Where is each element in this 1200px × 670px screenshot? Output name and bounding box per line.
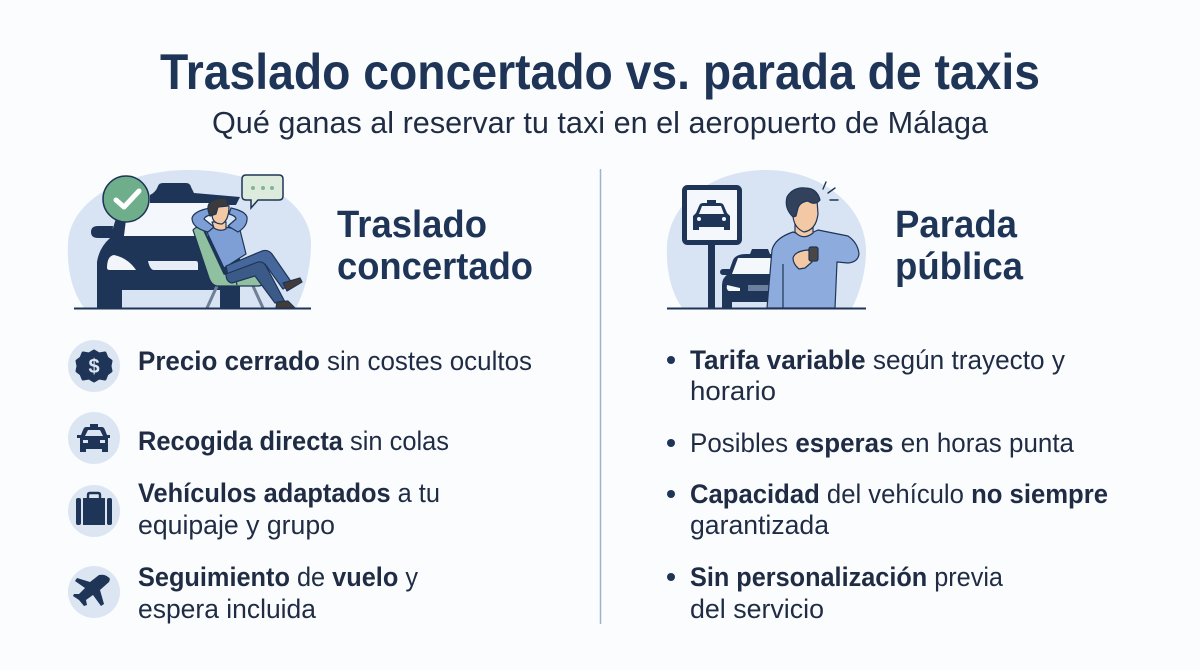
icon: plane [68,566,120,618]
icon: taxi [68,412,120,464]
subtitle: Qué ganas al reservar tu taxi en el aeropuerto de Málaga [212,105,989,140]
heading: traslado concertado [337,204,533,288]
heading: traslado concertado: Traslado [337,204,487,246]
heading: parada pública: Parada [895,204,1018,246]
item: capacidad del vehículo [667,479,1108,540]
item: recogida directa [68,412,449,464]
item: sin personalización: del servicio [690,594,824,624]
item: capacidad del vehículo: garantizada [690,510,830,540]
title: Traslado concertado vs. parada de taxis [160,44,1040,100]
panel: traslado concertado [68,170,533,624]
heading: parada pública: pública [895,246,1024,288]
heading: traslado concertado: concertado [337,246,533,288]
taxi stop sign [684,188,740,308]
item: sin personalización [667,562,1004,624]
item: sin personalización: Sin personalización previa [690,562,1004,592]
taxi [91,183,240,308]
item: seguimiento de vuelo: espera incluida [138,594,317,624]
item: seguimiento de vuelo [68,562,418,624]
heading: parada pública [895,204,1024,288]
icon: price badge [68,340,120,392]
icon: speech bubble [242,175,283,208]
icon: suitcase [68,485,120,537]
panel: parada pública [667,170,1108,624]
illustration: man waiting at taxi stop [667,170,866,308]
icon: price badge: $ [88,356,100,378]
item: posibles esperas: Posibles esperas en horas punta [690,428,1075,458]
item: tarifa variable [667,345,1065,406]
item: precio cerrado: Precio cerrado sin costes ocultos [138,346,532,376]
item: precio cerrado [68,340,532,392]
item: vehículos adaptados: Vehículos adaptados a tu [138,478,440,508]
item: recogida directa: Recogida directa sin colas [138,426,449,456]
item: seguimiento de vuelo: Seguimiento de vuelo y [138,562,418,592]
item: vehículos adaptados: equipaje y grupo [138,510,335,540]
man checking watch [767,188,859,308]
man relaxing in chair [192,198,302,308]
item: tarifa variable: horario [690,376,776,406]
icon: check badge [103,176,149,222]
item: tarifa variable: Tarifa variable según trayecto y [690,345,1065,375]
waiting taxi [720,249,776,308]
illustration: relaxed passenger and taxi [68,170,311,308]
item: vehículos adaptados [68,478,440,540]
item: capacidad del vehículo: Capacidad del vehículo no siempre [690,479,1108,509]
